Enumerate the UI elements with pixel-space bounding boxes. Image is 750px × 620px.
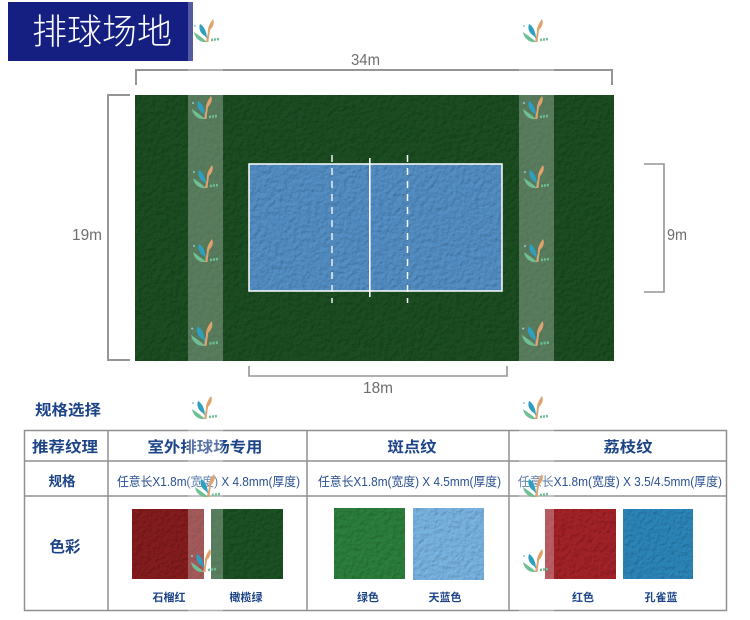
swatch: green: [334, 508, 405, 604]
spec row: [48, 473, 722, 489]
swatch: peacock blue: 孔雀蓝: [644, 591, 678, 604]
swatch: pomegranate red: [132, 509, 204, 604]
spec row: 规格: [48, 473, 76, 489]
dimension: court length 34m: 34m: [351, 52, 380, 69]
header row: 室外排球场专用: [148, 438, 262, 456]
swatch: sky blue: 天蓝色: [428, 590, 462, 604]
swatch: red: 红色: [572, 590, 594, 604]
swatch: red: [545, 509, 616, 604]
watermark logos: [191, 19, 549, 572]
colour row label: 色彩: [49, 537, 81, 556]
swatch: sky blue: [413, 508, 484, 604]
attack line left: [331, 155, 333, 303]
section heading: 规格选择: [35, 401, 101, 419]
specification table: [24, 430, 726, 610]
header row: [32, 438, 652, 456]
dimension: court length 34m: [136, 52, 612, 85]
court surround: [135, 95, 614, 361]
dimension: playing width 9m: 9m: [667, 227, 687, 244]
spec row: 任意长X1.8m(宽度) X 4.5mm(厚度): [318, 474, 501, 489]
attack line right: [406, 155, 408, 303]
dimension: court width 19m: [72, 95, 130, 360]
dimension: playing length 18m: [249, 366, 507, 397]
swatch: olive green: 橄榄绿: [230, 590, 262, 604]
title banner: [8, 2, 193, 61]
dimension: court width 19m: 19m: [72, 227, 102, 244]
spec row: 任意长X1.8m(宽度) X 4.8mm(厚度): [117, 474, 300, 489]
playing area: [249, 164, 502, 291]
court boundary: [249, 164, 502, 291]
dimension: playing length 18m: 18m: [363, 380, 393, 397]
title banner: 排球场地: [32, 13, 172, 52]
volleyball court: [135, 95, 614, 361]
swatch: green: 绿色: [357, 590, 379, 604]
swatch: pomegranate red: 石榴红: [152, 590, 186, 604]
header row: 荔枝纹: [604, 438, 652, 456]
dimension: playing width 9m: [644, 164, 687, 292]
table grid: [24, 430, 726, 610]
centre net line: [369, 158, 371, 297]
header row: 推荐纹理: [32, 438, 98, 456]
header row: 斑点纹: [388, 438, 436, 456]
spec row: 任意长X1.8m(宽度) X 3.5/4.5mm(厚度): [518, 474, 722, 489]
watermark bands: [188, 0, 554, 620]
swatch: olive green: [211, 509, 283, 604]
swatch: peacock blue: [623, 509, 693, 604]
